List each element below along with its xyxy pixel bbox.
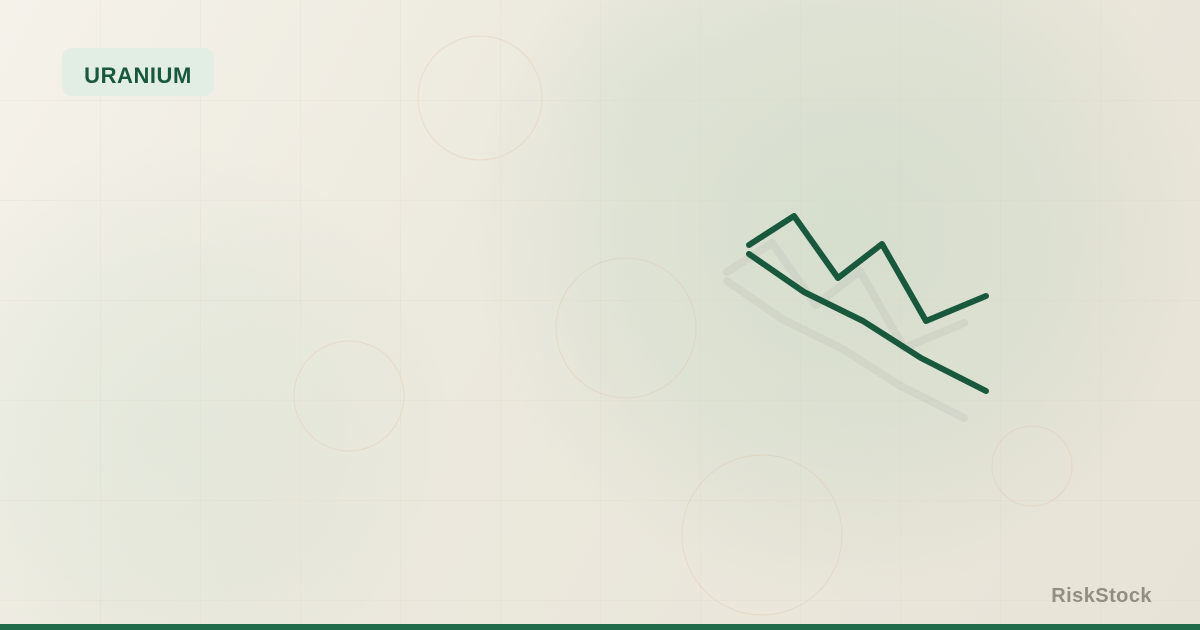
lower line xyxy=(749,254,986,391)
line shadows xyxy=(727,243,964,418)
upper line xyxy=(749,216,986,321)
bottom bar xyxy=(0,624,1200,630)
brand: RiskStock: RiskStock xyxy=(1051,585,1152,607)
badge: URANIUM xyxy=(62,48,214,96)
badge: URANIUM: URANIUM xyxy=(84,63,192,88)
